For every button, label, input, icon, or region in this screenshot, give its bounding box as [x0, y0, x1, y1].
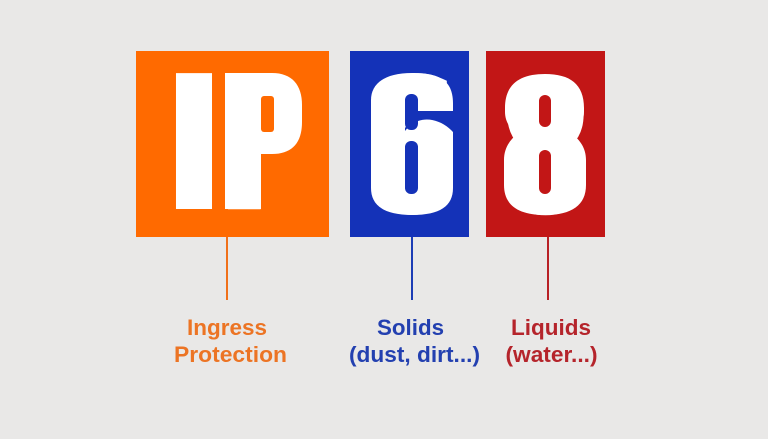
- label: Liquids: Liquids: [511, 315, 591, 340]
- label: Solids: (dust, dirt...): [349, 342, 480, 367]
- panel: 6: [350, 51, 469, 243]
- connector: orange: [226, 237, 228, 300]
- label: Solids: [349, 315, 480, 367]
- label: Ingress Protection: Protection: [174, 342, 287, 367]
- connector: red: [547, 237, 549, 300]
- label: Ingress Protection: Ingress: [187, 315, 267, 340]
- panel: IP: P: [226, 53, 298, 235]
- panel: IP: [136, 41, 329, 242]
- panel: 8: [486, 51, 605, 243]
- panel: 8: 8: [505, 55, 586, 243]
- connector: blue: [411, 237, 413, 300]
- label: Liquids: [506, 315, 598, 367]
- panel: IP: I: [170, 41, 218, 242]
- panel: 6: 6: [371, 52, 452, 243]
- label: Ingress Protection: [174, 315, 287, 367]
- label: Solids: Solids: [377, 315, 444, 340]
- label: Liquids: (water...): [506, 342, 598, 367]
